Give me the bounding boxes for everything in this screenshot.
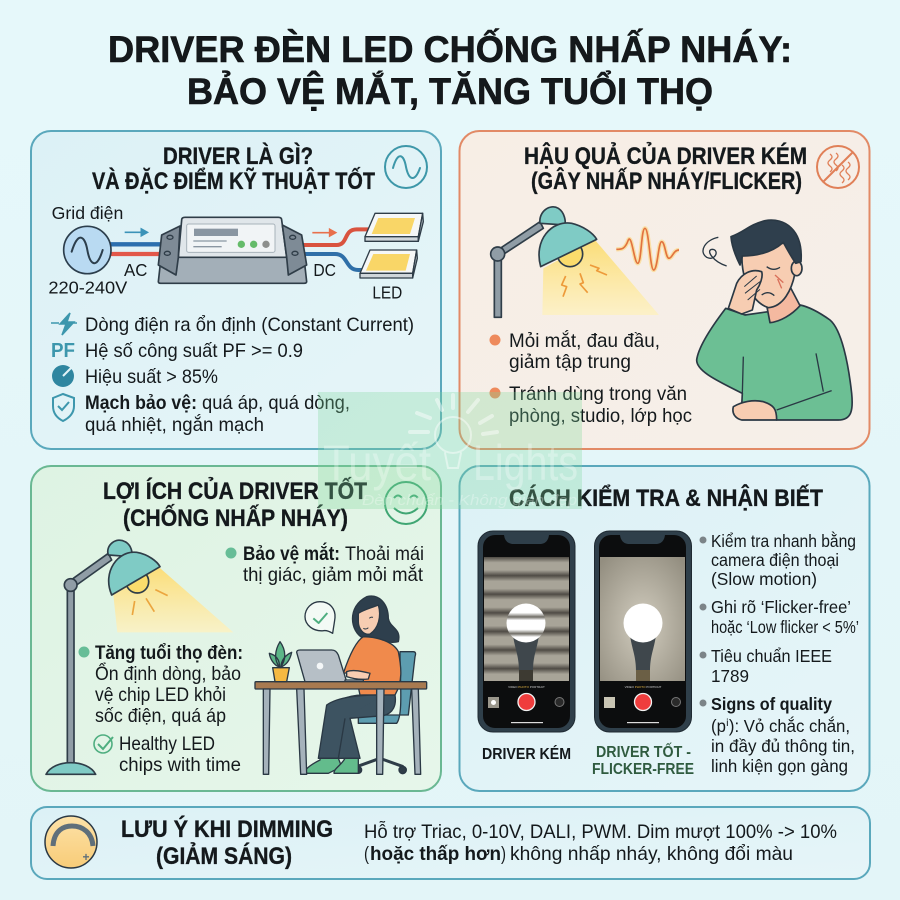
panel heading: driver bbox=[92, 142, 375, 195]
bullet: eye protection: thị giác, giảm mỏi mắt bbox=[243, 563, 424, 586]
panel heading: benefits: LỢI ÍCH CỦA DRIVER TỐT bbox=[103, 476, 367, 505]
bullet: camera check: Kiểm tra nhanh bằng bbox=[711, 530, 856, 551]
panel heading: consequences bbox=[524, 141, 807, 195]
arrow: AC bbox=[125, 229, 147, 236]
watermark bbox=[318, 392, 582, 509]
bullet: eye strain: Mỏi mắt, đau đầu, bbox=[509, 329, 660, 352]
spec: protection: Mạch bảo vệ: bbox=[85, 392, 197, 414]
illustration: flickering lamp bbox=[491, 207, 679, 317]
watermark: Đèn chuẩn - Không gian đẹp bbox=[362, 492, 577, 509]
note: healthy chips bbox=[94, 733, 241, 776]
bullet: standard: 1789 bbox=[711, 666, 749, 686]
panel: dimming note bbox=[31, 807, 870, 879]
watermark: Tuyết bbox=[323, 435, 431, 491]
heading: dimming bbox=[121, 815, 333, 870]
speech bubble check bbox=[305, 602, 335, 633]
bullet: eye protection: Bảo vệ mắt: bbox=[243, 541, 340, 565]
title: DRIVER ĐÈN LED CHỐNG NHẤP NHÁY: bbox=[108, 28, 792, 70]
text: dimming details: ( bbox=[364, 843, 369, 865]
bullet: signs of quality bbox=[700, 694, 855, 776]
panel heading: check: CÁCH KIỂM TRA & NHẬN BIẾT bbox=[509, 484, 823, 512]
bullet: labelling: Ghi rõ ‘Flicker-free’ bbox=[711, 597, 851, 617]
panel: consequences bbox=[460, 131, 870, 449]
bullet: signs of quality: (pⁱ): Vỏ chắc chắn, bbox=[711, 715, 850, 736]
phone: good driver bbox=[594, 531, 692, 732]
bullet: eye strain: giảm tập trung bbox=[509, 351, 631, 373]
bullet: signs of quality: linh kiện gọn gàng bbox=[711, 756, 848, 776]
DC wires bbox=[302, 229, 370, 270]
text: dimming details: không nhấp nháy, không đổi màu bbox=[510, 843, 793, 865]
label: LED: LED bbox=[372, 282, 402, 302]
title: BẢO VỆ MẮT, TĂNG TUỔI THỌ bbox=[187, 69, 713, 112]
caption: bad driver: DRIVER KÉM bbox=[482, 744, 571, 763]
label: voltage: 220-240V bbox=[48, 277, 127, 297]
bullet: signs of quality: in đầy đủ thông tin, bbox=[711, 736, 855, 756]
bullet: eye protection: Thoải mái bbox=[345, 543, 424, 565]
note: healthy chips: Healthy LED bbox=[119, 733, 215, 755]
circuit diagram: grid to driver to LED bbox=[48, 203, 423, 302]
text: dimming details bbox=[364, 820, 837, 865]
caption: good driver: DRIVER TỐT - bbox=[596, 741, 691, 761]
heading: dimming: LƯU Ý KHI DIMMING bbox=[121, 815, 333, 843]
bullet: longer lifespan: Ổn định dòng, bảo bbox=[95, 661, 241, 685]
bullet: avoid: Tránh dùng trong văn bbox=[509, 383, 687, 405]
heading: dimming: (GIẢM SÁNG) bbox=[156, 841, 292, 870]
panel heading: consequences: HẬU QUẢ CỦA DRIVER KÉM bbox=[524, 141, 807, 170]
bullet: camera check bbox=[700, 530, 856, 589]
caption: good driver: FLICKER-FREE bbox=[592, 761, 694, 778]
panel heading: driver: VÀ ĐẶC ĐIỂM KỸ THUẬT TỐT bbox=[92, 167, 375, 195]
icon: dimmer dial bbox=[45, 816, 97, 868]
icon: smile bbox=[385, 482, 427, 524]
arrow: DC bbox=[312, 229, 336, 236]
AC wires bbox=[108, 244, 163, 254]
bullet: eye strain bbox=[490, 329, 660, 373]
note: healthy chips: chips with time bbox=[119, 754, 241, 776]
illustration: good lamp bbox=[46, 540, 233, 774]
text: dimming details: ) bbox=[501, 843, 506, 865]
bullet: signs of quality: Signs of quality bbox=[711, 694, 832, 714]
panel heading: consequences: (GÂY NHẤP NHÁY/FLICKER) bbox=[531, 167, 802, 195]
illustration: tired man bbox=[697, 220, 852, 420]
spec: protection bbox=[53, 392, 350, 436]
text: dimming details: hoặc thấp hơn bbox=[370, 843, 501, 865]
spec: power factor: PF bbox=[51, 340, 75, 362]
bullet: avoid bbox=[490, 383, 692, 427]
spec: protection: quá nhiệt, ngắn mạch bbox=[85, 413, 264, 436]
icon: no flicker bbox=[817, 146, 859, 188]
panel heading: driver: DRIVER LÀ GÌ? bbox=[163, 142, 313, 170]
spec: protection: quá áp, quá dòng, bbox=[202, 392, 350, 414]
illustration: woman at desk bbox=[255, 596, 427, 774]
bullet: camera check: (Slow motion) bbox=[711, 569, 817, 589]
panel heading: benefits bbox=[103, 476, 367, 532]
bullet: camera check: camera điện thoại bbox=[711, 550, 839, 570]
phone: good driver: VIDEO PHOTO PORTRAIT bbox=[625, 685, 662, 689]
text: dimming details: Hỗ trợ Triac, 0-10V, DALI, PWM. Dim mượt 100% -> 10% bbox=[364, 820, 837, 843]
caption: good driver bbox=[592, 741, 694, 778]
label: AC: AC bbox=[124, 260, 147, 280]
bullet: avoid: phòng, studio, lớp học bbox=[509, 405, 692, 427]
label: grid: Grid điện bbox=[52, 203, 123, 223]
bullet: labelling: hoặc ‘Low flicker < 5%’ bbox=[711, 617, 859, 637]
panel: how to check bbox=[460, 466, 870, 791]
title bbox=[108, 28, 792, 112]
bullet: labelling bbox=[700, 597, 859, 637]
driver box bbox=[158, 217, 307, 283]
bullet: standard bbox=[700, 646, 832, 686]
bullet: standard: Tiêu chuẩn IEEE bbox=[711, 646, 832, 666]
spec: constant current: Dòng điện ra ổn định (Constant Current) bbox=[85, 314, 414, 336]
bullet: longer lifespan bbox=[78, 642, 243, 727]
icon: AC source bbox=[64, 226, 111, 274]
label: DC: DC bbox=[313, 260, 336, 280]
bullet: longer lifespan: vệ chip LED khỏi bbox=[95, 684, 226, 706]
spec: efficiency: Hiệu suất > 85% bbox=[85, 366, 218, 388]
panel heading: benefits: (CHỐNG NHẤP NHÁY) bbox=[123, 504, 348, 532]
panel: driver specs bbox=[31, 131, 441, 449]
watermark: Lights bbox=[473, 435, 578, 491]
bullet: eye protection bbox=[226, 541, 424, 586]
bullet: longer lifespan: Tăng tuổi thọ đèn: bbox=[95, 642, 243, 664]
phone: bad driver bbox=[478, 531, 575, 732]
phone: bad driver: VIDEO PHOTO PORTRAIT bbox=[508, 685, 545, 689]
bullet: longer lifespan: sốc điện, quá áp bbox=[95, 705, 226, 727]
panel: benefits bbox=[31, 466, 441, 791]
spec: power factor: Hệ số công suất PF >= 0.9 bbox=[85, 340, 303, 362]
icon: dimmer dial: + bbox=[82, 850, 90, 864]
LED chips bbox=[360, 213, 423, 278]
icon: sine wave bbox=[385, 146, 427, 188]
